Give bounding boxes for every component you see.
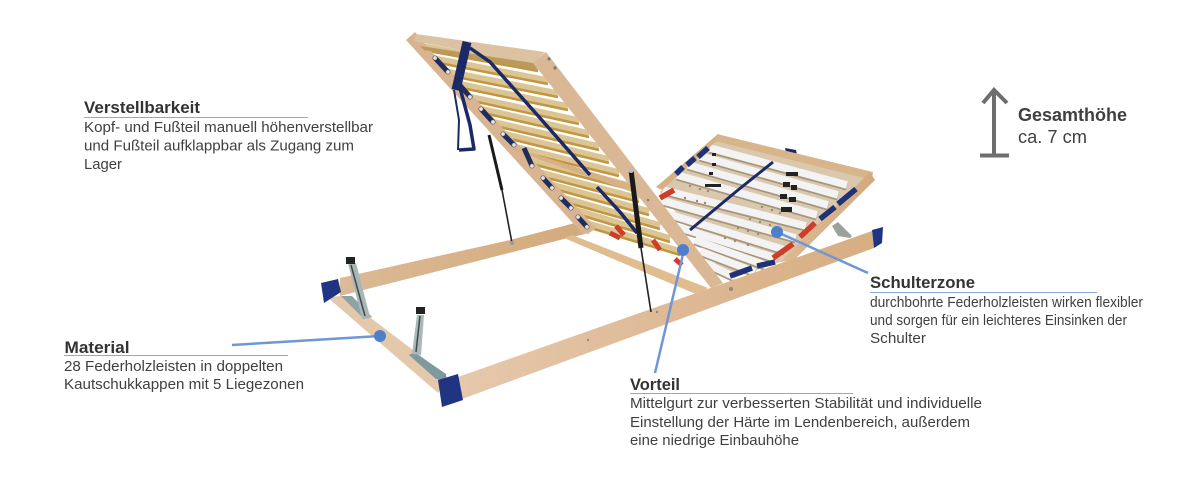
centre strap (470, 48, 637, 233)
text block: Vorteil: Vorteil (630, 375, 680, 394)
text block: Vorteil (630, 375, 982, 449)
text block: Vorteil: Einstellung der Härte im Lendenbereich, außerdem (630, 415, 970, 431)
foot section slats (660, 149, 847, 278)
head section (406, 32, 723, 288)
text block: Schulterzone: und sorgen für ein leichteres Einsinken der (870, 313, 1127, 329)
red caps (610, 226, 682, 265)
head top rail (414, 34, 545, 64)
callout line: Material (232, 330, 386, 345)
head left rail (406, 32, 596, 234)
gas spring left (489, 135, 514, 245)
icon: height arrow (980, 90, 1009, 156)
foot centre strap (690, 162, 773, 230)
text block: Material: Kautschukkappen mit 5 Liegezonen (64, 377, 304, 393)
rail bolts and caps (435, 58, 587, 227)
text block: Gesamthöhe: ca. 7 cm (1018, 127, 1087, 147)
middle cross rail (564, 235, 708, 295)
text block: Gesamthöhe: Gesamthöhe (1018, 105, 1127, 125)
bracket right (409, 307, 446, 381)
text block: Schulterzone (870, 273, 1143, 347)
head cross member (512, 148, 632, 192)
foot side rails (656, 134, 721, 190)
text block: Material (64, 338, 304, 393)
foot section (656, 134, 875, 280)
text block: Material: 28 Federholzleisten in doppelten (64, 359, 283, 375)
foot caps (676, 148, 856, 219)
text block: Schulterzone: durchbohrte Federholzleisten wirken flexibler (870, 295, 1143, 311)
front cross rail (327, 296, 447, 393)
blue end caps (321, 279, 341, 303)
text block: Vorteil: Mittelgurt zur verbesserten Stabilität und individuelle (630, 396, 982, 412)
slat holes (684, 185, 781, 246)
text block: Verstellbarkeit: Lager (84, 157, 122, 173)
text block: Verstellbarkeit (84, 98, 373, 173)
text block: Schulterzone: Schulter (870, 331, 926, 347)
blue tab on top rail (785, 148, 797, 155)
text block: Vorteil: eine niedrige Einbauhöhe (630, 433, 799, 449)
callout line: Schulterzone (771, 226, 868, 273)
gas spring right (628, 167, 651, 312)
text block: Material: Material (64, 338, 130, 357)
text block: Schulterzone: Schulterzone (870, 273, 975, 292)
head right rail (533, 52, 723, 288)
strap loop (454, 42, 474, 150)
slatted bed frame illustration (321, 32, 883, 407)
text block: Gesamthöhe (1018, 105, 1127, 147)
foot support bracket (832, 222, 852, 238)
head section slats (423, 47, 680, 252)
black clips (705, 153, 798, 212)
text block: Verstellbarkeit: Kopf- und Fußteil manuell höhenverstellbar (84, 120, 373, 136)
text block: Verstellbarkeit: Verstellbarkeit (84, 98, 200, 117)
callout line: Vorteil (655, 244, 689, 373)
back long rail (340, 223, 585, 296)
front long rail (458, 231, 874, 399)
text block: Verstellbarkeit: und Fußteil aufklappbar als Zugang zum (84, 138, 354, 154)
bracket left (341, 257, 372, 319)
